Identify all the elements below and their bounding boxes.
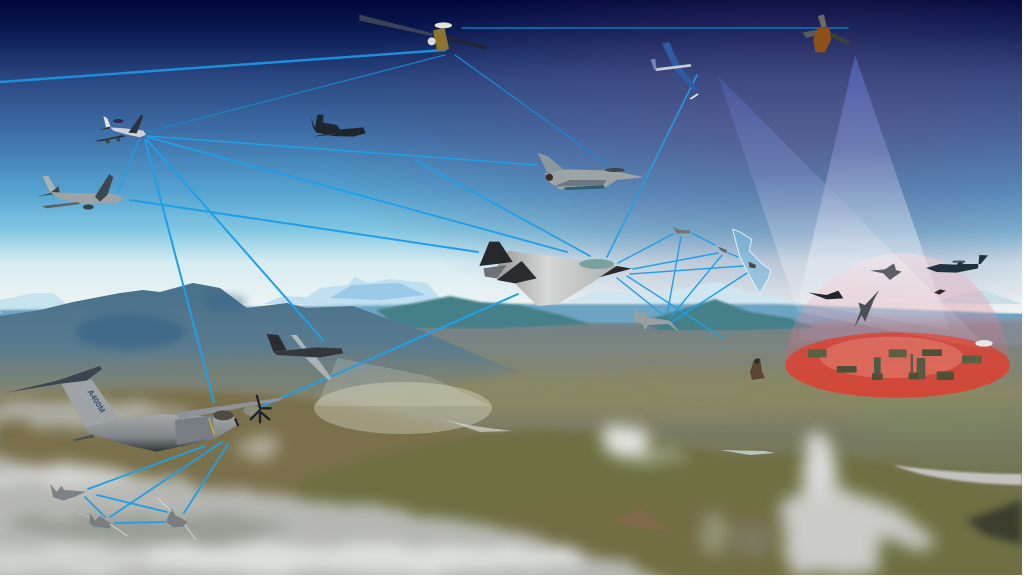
fuselage [85,414,239,452]
cloud puffs [236,426,935,575]
HAPS drone beam [718,76,990,350]
escort jets [50,484,196,540]
satellite beam [798,55,950,330]
inner zone [820,337,963,378]
satellite left [359,15,487,52]
ground plain [0,314,1024,577]
tail marking: A400M [86,388,107,415]
ground defence units [808,340,993,380]
radar dish [975,340,993,347]
UAV surveillance beam and footprint [314,358,512,434]
cloud bank bottom left [0,401,690,577]
data links [0,28,848,523]
transport aircraft [7,366,283,452]
olive foothills [0,376,1022,549]
long-endurance drone top [311,114,366,137]
air defence dome [785,253,1010,398]
Eurofighter [537,153,644,190]
tanker aircraft [37,174,124,210]
red ground zone [785,332,1010,398]
distant snowy mountains [0,277,1022,312]
enemy aircraft in dome [809,255,988,328]
sky background [0,0,1024,320]
wing [177,397,283,419]
radar stealth silhouette [733,229,771,293]
right distant hills [376,296,1024,345]
far blue ridge [0,304,1024,324]
engines [213,410,233,420]
satellite right [803,15,851,53]
ground soldier marker [750,358,765,380]
high altitude drone [651,42,699,99]
tail [60,379,118,427]
wingman jet below centre [634,307,680,333]
AWACS aircraft [94,115,146,143]
big mountain on left [0,283,520,400]
future combat aircraft [479,242,632,306]
small wingman jets near centre [673,226,771,293]
MQ-4 style medium drone [267,334,343,380]
